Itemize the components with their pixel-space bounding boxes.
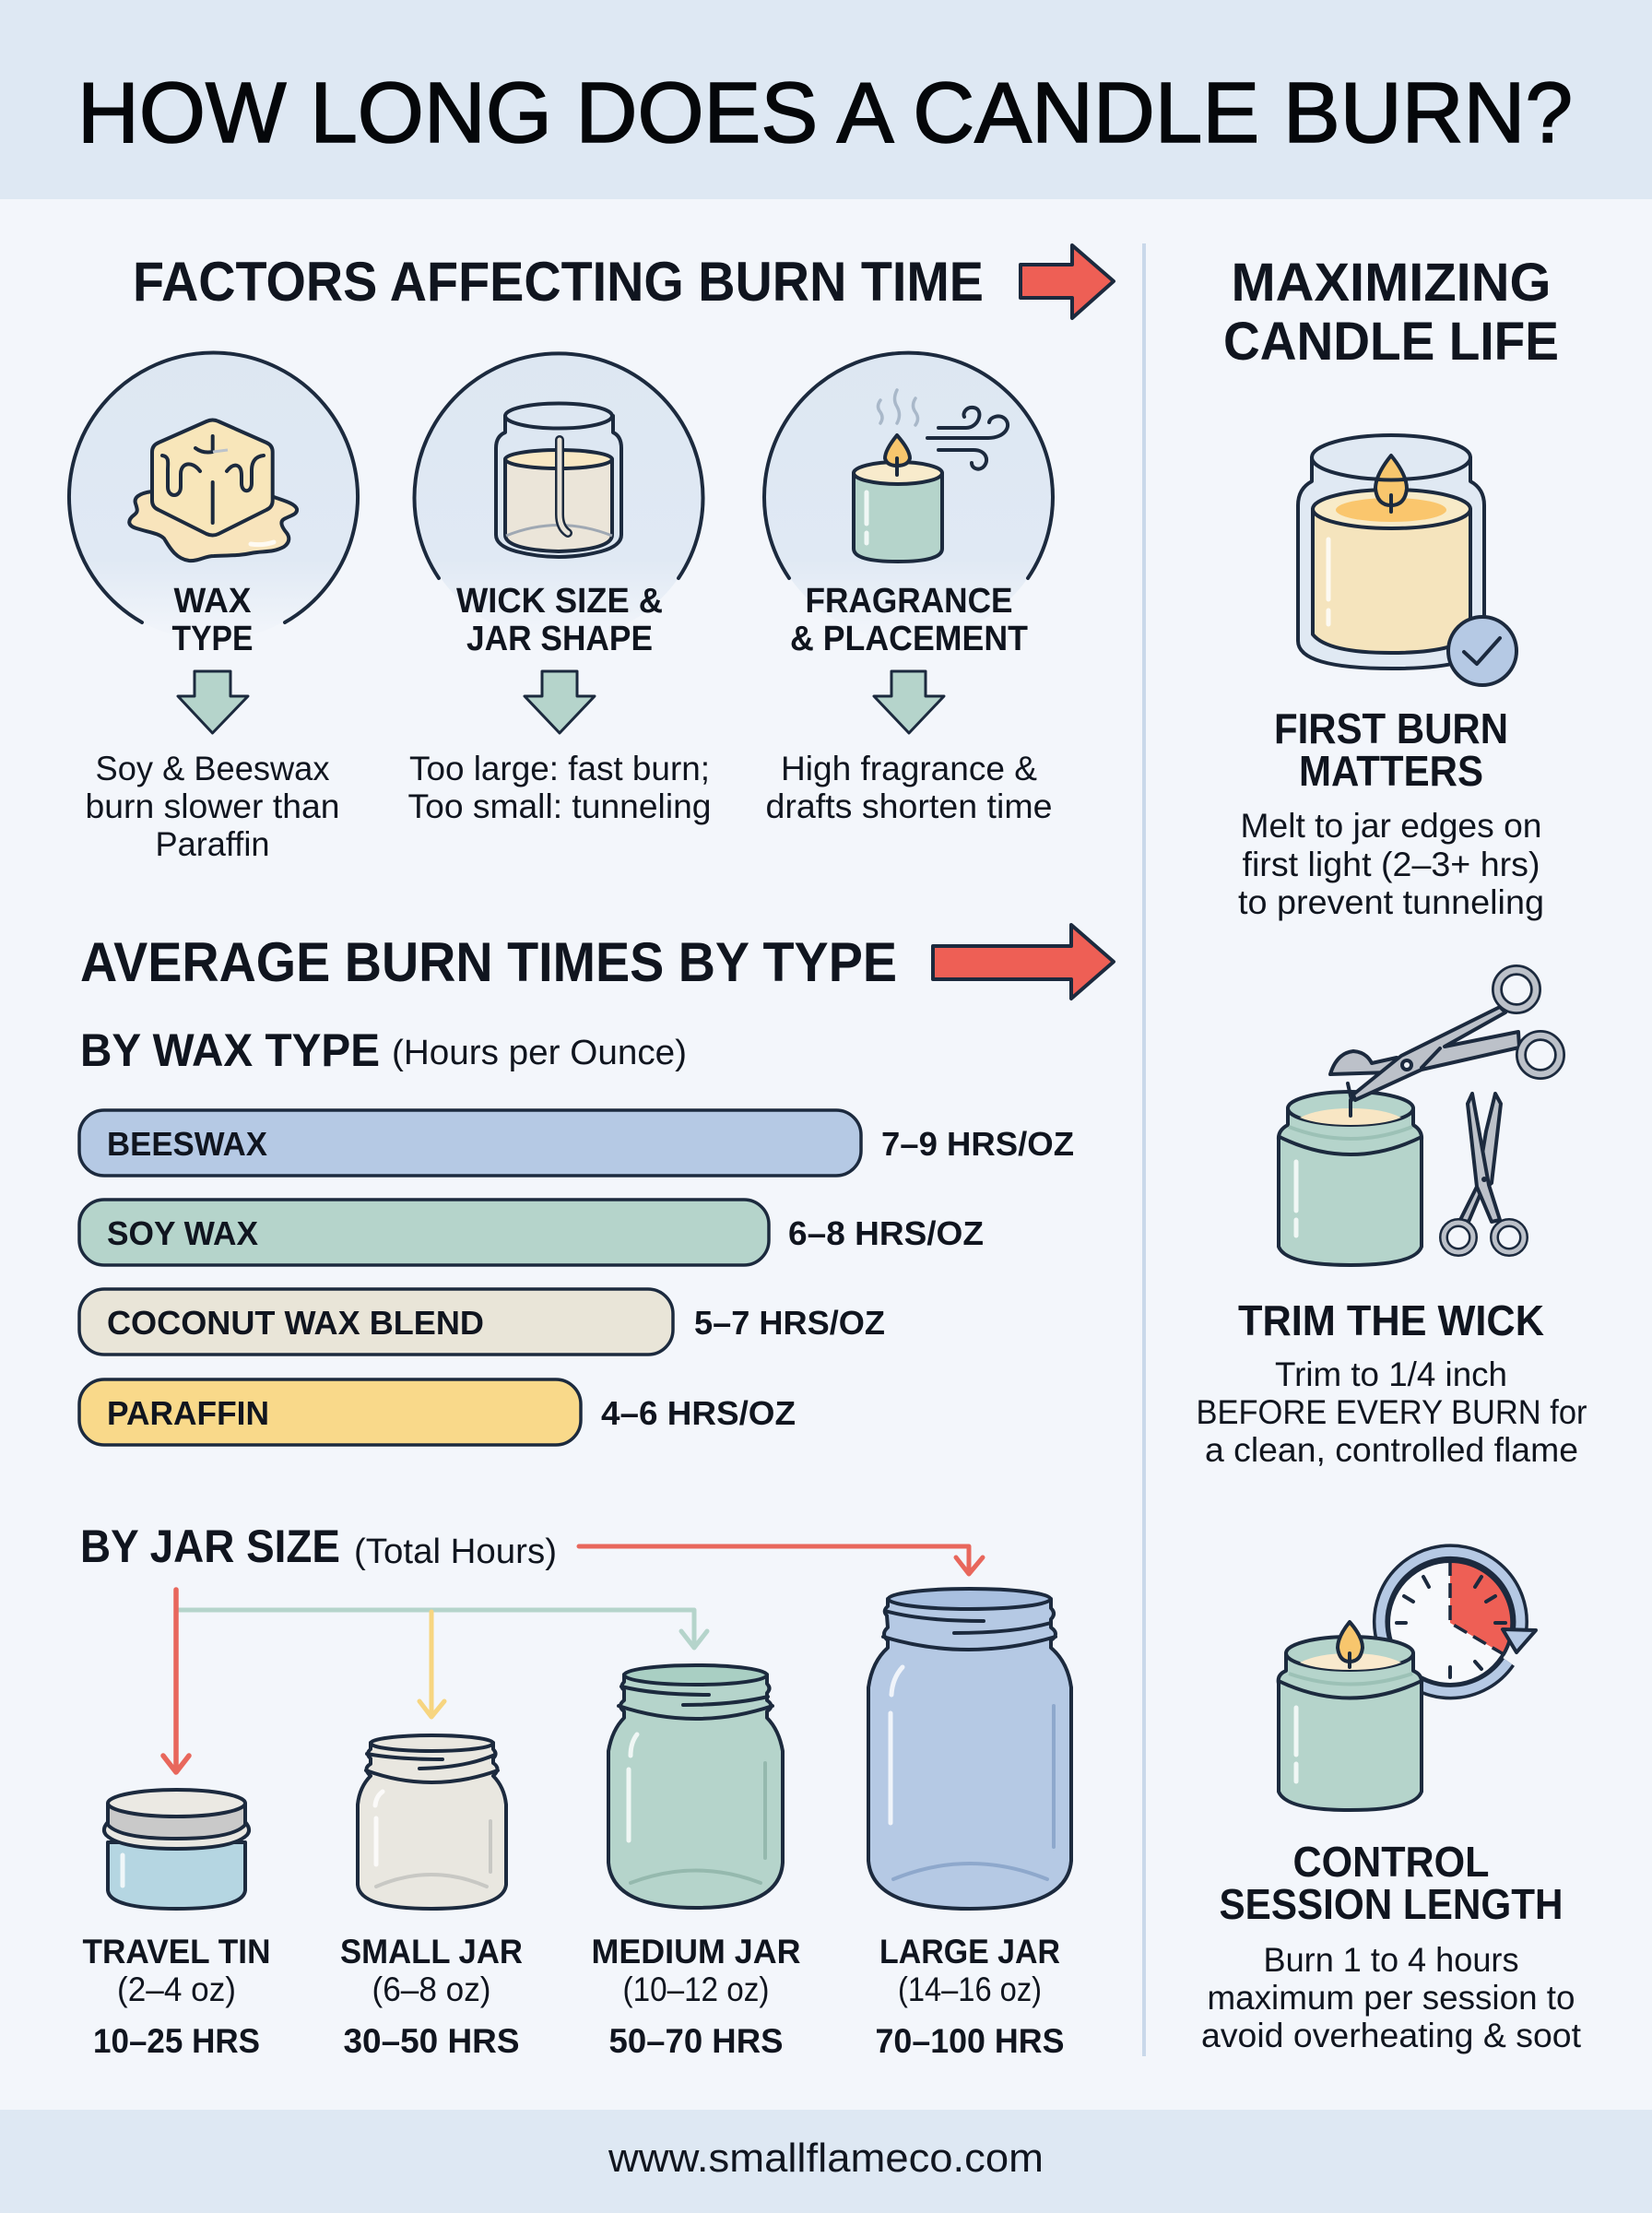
text: first burn description [1238,807,1544,921]
text: trim description: BEFORE EVERY BURN for [1197,1393,1587,1431]
heading: maximizing candle life: MAXIMIZING [1232,253,1551,313]
arrow: down [178,671,248,733]
label: fragrance and placement: FRAGRANCE [806,582,1012,621]
heading: average burn times by type: AVERAGE BURN TIMES BY TYPE [80,931,897,993]
labels: travel tin: 10–25 HRS [93,2022,260,2060]
labels: large jar [876,1933,1064,2060]
icon: large jar [868,1589,1071,1909]
arrow: to travel tin [163,1590,189,1772]
label: fragrance and placement [790,582,1028,658]
text: wax type description [85,750,339,863]
bar: coconut wax blend [79,1289,885,1355]
heading: first burn matters [1274,704,1508,795]
icon: travel tin [104,1790,249,1909]
footer url: www.smallflameco.com [608,2136,1044,2181]
text: session description: Burn 1 to 4 hours [1263,1941,1519,1979]
header band [0,0,1652,199]
heading: maximizing candle life: CANDLE LIFE [1223,312,1559,372]
labels: small jar [340,1933,523,2060]
text: first burn description: first light (2–3+ hrs) [1243,846,1540,883]
icon: jar with wick [415,352,704,640]
labels: large jar: LARGE JAR [879,1933,1060,1970]
bar: soy wax [79,1200,984,1265]
bar: beeswax [79,1110,1074,1176]
label: fragrance and placement: & PLACEMENT [790,620,1028,658]
bar chart: hours per ounce by wax [79,1110,1074,1445]
heading: control session length: SESSION LENGTH [1219,1880,1564,1928]
heading: trim the wick: TRIM THE WICK [1238,1296,1544,1344]
arrow: average burn times [933,925,1114,999]
text: wax type description: burn slower than [85,787,339,825]
labels: medium jar: MEDIUM JAR [592,1933,800,1970]
label: wick size and jar shape [456,582,663,658]
text: first burn description: to prevent tunneling [1238,883,1544,921]
labels: medium jar: (10–12 oz) [623,1970,769,2008]
bar: soy wax: SOY WAX [107,1214,258,1252]
labels: large jar: 70–100 HRS [876,2022,1064,2060]
heading: maximizing candle life [1223,253,1559,372]
panel: fragrance and placement [764,352,1053,825]
labels: medium jar: 50–70 HRS [608,2022,784,2060]
text: wax type description: Paraffin [155,825,269,863]
icon: melting wax cube [68,352,358,640]
arrow: to large jar [579,1546,983,1574]
text: first burn description: Melt to jar edges on [1241,807,1541,845]
labels: small jar: (6–8 oz) [372,1970,490,2008]
arrow: to medium jar [176,1610,707,1648]
bar: beeswax: BEESWAX [107,1125,267,1163]
text: wick description [407,750,712,825]
labels: small jar: 30–50 HRS [343,2022,520,2060]
label: wax type: TYPE [171,620,253,658]
bar: beeswax: 7–9 HRS/OZ [881,1125,1074,1163]
labels: travel tin: (2–4 oz) [117,1970,236,2008]
footer band [0,2110,1652,2213]
text: fragrance description: drafts shorten time [765,787,1053,825]
text: wax type description: Soy & Beeswax [96,750,330,787]
text: fragrance description [765,750,1053,825]
arrow: down [525,671,595,733]
panel: trim the wick [1197,970,1587,1469]
panel: first burn matters [1238,435,1544,921]
panel: wick size and jar shape [407,352,712,825]
bar: paraffin [79,1379,796,1445]
subheading: by wax type: BY WAX TYPE [80,1024,380,1076]
icon: small jar [358,1735,506,1909]
arrow: down [874,671,944,733]
subheading: by jar size: (Total Hours) [354,1533,557,1571]
label: wick size and jar shape: JAR SHAPE [466,620,653,658]
subheading: by jar size: BY JAR SIZE [80,1521,340,1572]
text: trim description [1197,1355,1587,1469]
heading: control session length: CONTROL [1292,1838,1490,1886]
bar: coconut wax blend: COCONUT WAX BLEND [107,1304,484,1342]
icon: medium jar [608,1665,783,1908]
label: wick size and jar shape: WICK SIZE & [456,582,663,621]
text: wick description: Too small: tunneling [407,787,712,825]
icon: candle jar with check badge [1298,435,1516,685]
label: wax type [171,582,253,658]
text: trim description: Trim to 1/4 inch [1275,1355,1507,1393]
label: wax type: WAX [173,582,252,621]
labels: travel tin [83,1933,271,2060]
text: trim description: a clean, controlled flame [1205,1431,1578,1469]
text: session description [1201,1941,1582,2054]
heading: first burn matters: MATTERS [1299,747,1483,795]
text: session description: maximum per session to [1208,1979,1575,2017]
arrow: factors to maximizing [1021,245,1114,318]
labels: travel tin: TRAVEL TIN [83,1933,271,1970]
bar: coconut wax blend: 5–7 HRS/OZ [694,1304,885,1342]
bar: paraffin: PARAFFIN [107,1394,269,1432]
icon: candle with timer [1279,1552,1536,1810]
title: HOW LONG DOES A CANDLE BURN? [77,65,1573,160]
subheading: by wax type: (Hours per Ounce) [392,1034,687,1072]
text: session description: avoid overheating & soot [1201,2017,1582,2054]
labels: medium jar [592,1933,800,2060]
icon: jar with wick trimmer and scissors [1279,970,1560,1265]
heading: factors affecting burn time: FACTORS AFFECTING BURN TIME [133,251,984,313]
heading: control session length [1219,1838,1564,1928]
panel: wax type [68,352,358,863]
panel: control session length [1201,1552,1582,2054]
subheading: by jar size [80,1521,557,1572]
arrow: to small jar [419,1612,444,1717]
subheading: by wax type [80,1024,687,1076]
text: wick description: Too large: fast burn; [409,750,710,787]
heading: first burn matters: FIRST BURN [1274,704,1508,752]
labels: small jar: SMALL JAR [340,1933,523,1970]
text: fragrance description: High fragrance & [781,750,1037,787]
bar: paraffin: 4–6 HRS/OZ [601,1394,796,1432]
icon: candle in a draft [764,352,1053,640]
bar: soy wax: 6–8 HRS/OZ [788,1214,984,1252]
labels: large jar: (14–16 oz) [898,1970,1042,2008]
